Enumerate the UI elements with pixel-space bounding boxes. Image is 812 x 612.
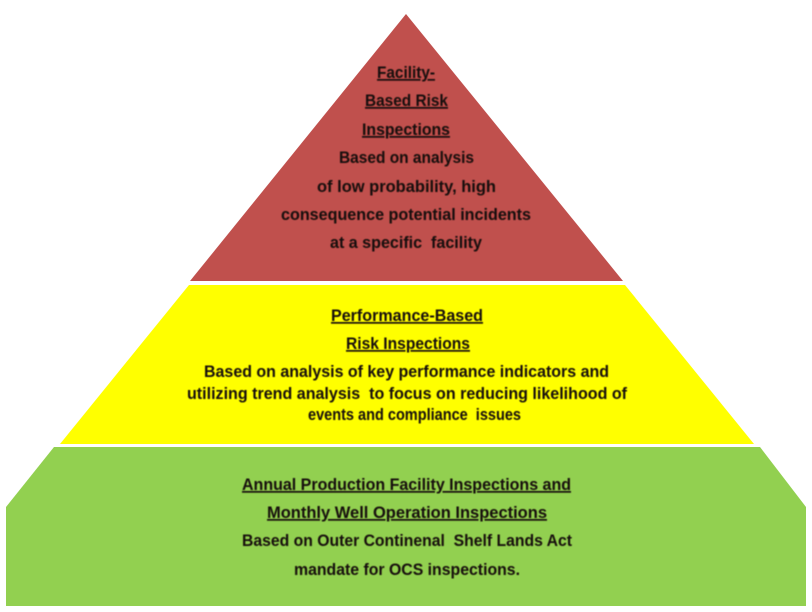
text block: performance-based description: Based on analysis of key performance indicators and [204, 362, 609, 381]
text block: facility-based description [281, 148, 531, 252]
heading: annual production and monthly well inspections [242, 475, 571, 522]
panel: top tier, facility-based risk inspections [190, 14, 623, 281]
heading: facility-based risk inspections: Inspections [362, 120, 450, 139]
panel: bottom tier, annual and monthly inspections [6, 447, 806, 606]
text block: OCS mandate description [242, 531, 572, 579]
text block: performance-based description: utilizing trend analysis to focus on reducing likelihood of [187, 384, 627, 403]
text block: performance-based description: events and compliance issues [308, 405, 521, 424]
heading: performance-based risk inspections: Risk Inspections [346, 334, 470, 353]
heading: facility-based risk inspections: Based Risk [365, 91, 448, 110]
heading: facility-based risk inspections: Facility- [377, 63, 435, 82]
text block: OCS mandate description: Based on Outer Continenal Shelf Lands Act [242, 531, 572, 550]
panel: middle tier, performance-based risk inspections [60, 285, 754, 444]
text block: performance-based description [187, 362, 627, 424]
text block: facility-based description: of low probability, high [317, 177, 496, 196]
heading: performance-based risk inspections [331, 306, 483, 353]
text block: facility-based description: at a specific facility [330, 233, 483, 252]
heading: facility-based risk inspections [362, 63, 450, 139]
text block: facility-based description: Based on analysis [339, 148, 474, 167]
heading: annual production and monthly well inspections: Monthly Well Operation Inspections [267, 503, 547, 522]
text block: OCS mandate description: mandate for OCS inspections. [294, 560, 520, 579]
text block: facility-based description: consequence potential incidents [281, 205, 531, 224]
heading: annual production and monthly well inspections: Annual Production Facility Inspections and [242, 475, 571, 494]
heading: performance-based risk inspections: Performance-Based [331, 306, 483, 325]
